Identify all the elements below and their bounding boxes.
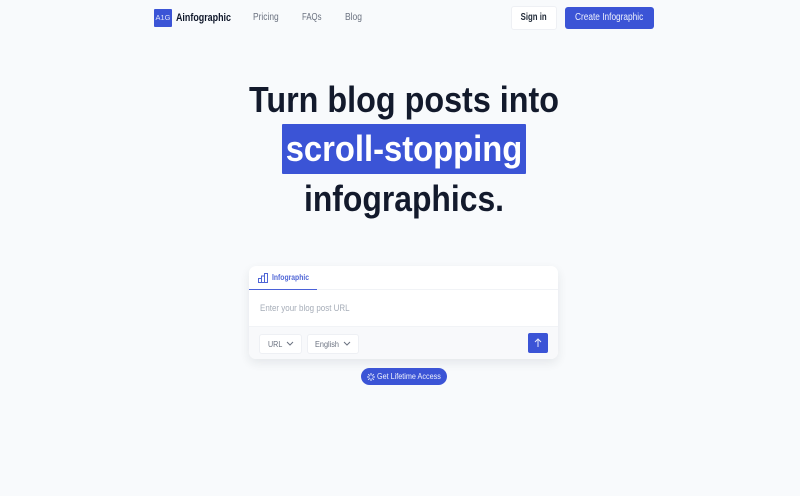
headline bbox=[248, 79, 559, 219]
icon: chevron bbox=[344, 342, 350, 346]
sign in button bbox=[511, 6, 557, 30]
tab bar bbox=[249, 266, 558, 290]
highlighted phrase: scroll-stopping bbox=[286, 128, 522, 169]
icon: sparkle bbox=[367, 373, 375, 381]
nav link: blog: Blog bbox=[345, 12, 362, 23]
create infographic button bbox=[565, 7, 654, 29]
tab label: Infographic bbox=[272, 273, 309, 282]
select label: English bbox=[315, 339, 339, 349]
icon: up arrow bbox=[534, 338, 542, 347]
logo wordmark: Ainfographic bbox=[176, 12, 231, 24]
sign in button: Sign in bbox=[521, 12, 547, 23]
logo mark: A1G bbox=[155, 13, 170, 22]
nav link: faqs: FAQs bbox=[302, 12, 322, 23]
headline line 1: Turn blog posts into bbox=[248, 79, 559, 120]
lifetime access badge bbox=[361, 368, 447, 385]
icon: chevron bbox=[286, 342, 294, 346]
active tab: infographic bbox=[249, 266, 317, 290]
logo mark bbox=[154, 9, 172, 27]
submit button bbox=[528, 333, 548, 353]
language select bbox=[307, 334, 359, 354]
icon: bar chart bbox=[258, 273, 268, 283]
badge label: Get Lifetime Access bbox=[377, 371, 441, 381]
create infographic button: Create Infographic bbox=[575, 12, 644, 23]
url select bbox=[259, 334, 302, 354]
input card bbox=[249, 266, 558, 359]
url input placeholder: Enter your blog post URL bbox=[260, 303, 350, 314]
controls footer bbox=[249, 326, 558, 360]
select label: URL bbox=[268, 339, 282, 349]
headline line 3: infographics. bbox=[304, 178, 504, 219]
nav link: pricing: Pricing bbox=[253, 12, 279, 23]
nav bar bbox=[154, 6, 654, 30]
